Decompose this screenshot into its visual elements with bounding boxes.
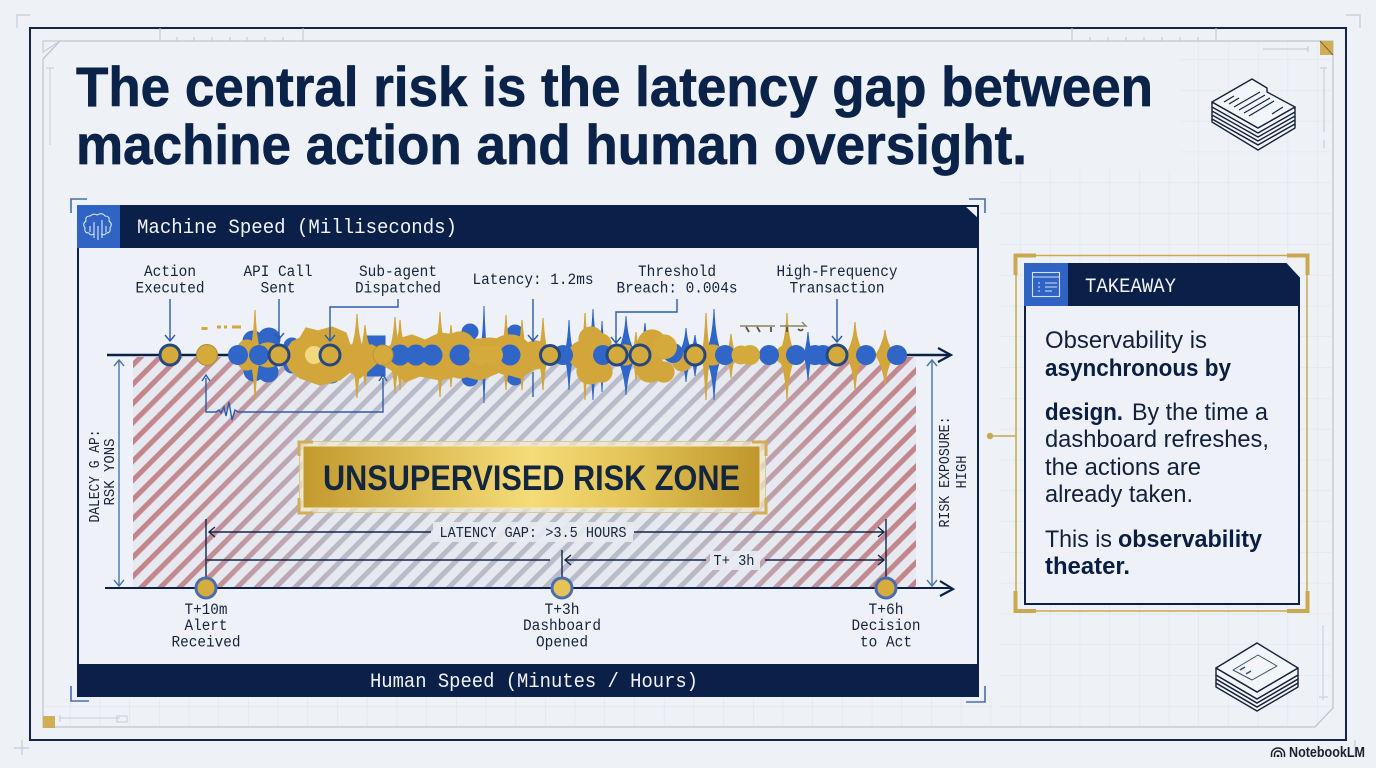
label: latency gap: LATENCY GAP: >3.5 HOURS (440, 526, 626, 542)
panel: machine and human speed (71, 199, 985, 702)
right vertical label: HIGH (954, 456, 971, 488)
banner: unsupervised risk zone (299, 442, 766, 513)
labels: human milestones: Decision (852, 617, 920, 635)
icon: chip stack (1216, 643, 1298, 711)
connector to takeaway (987, 433, 1016, 439)
hatched risk zone (133, 357, 916, 588)
takeaway text: By the time a (1132, 399, 1268, 426)
callouts: machine event labels: Threshold (638, 263, 716, 281)
takeaway text: This is (1045, 526, 1112, 553)
callouts: machine event labels: Sent (260, 280, 296, 298)
takeaway text (1045, 327, 1269, 580)
gold frame (1016, 256, 1308, 611)
panel: takeaway (1016, 256, 1308, 611)
title: machine action and human oversight. (76, 113, 1027, 176)
left vertical label (87, 430, 119, 522)
title (76, 55, 1153, 176)
axis: machine timeline (107, 348, 951, 362)
machine speed header: Machine Speed (Milliseconds) (137, 217, 457, 240)
human speed footer: Human Speed (Minutes / Hours) (370, 671, 698, 694)
takeaway text: already taken. (1045, 481, 1193, 508)
corner brackets (71, 199, 985, 702)
takeaway text: observability (1118, 526, 1262, 553)
latency gap brackets (206, 519, 886, 578)
panel body (78, 206, 978, 696)
callouts: machine event labels: High-Frequency (776, 263, 898, 281)
icon: circuit gear (84, 214, 111, 240)
labels: human milestones (172, 601, 920, 652)
labels: human milestones: Alert (184, 617, 228, 635)
callouts: machine event labels: Transaction (790, 280, 884, 298)
labels: human milestones: T+3h (544, 601, 580, 619)
takeaway text: design. (1045, 399, 1123, 426)
labels: human milestones: to Act (860, 634, 912, 652)
human speed footer (77, 664, 979, 697)
left vertical label: RSK YONS (102, 438, 119, 506)
arrow: latency gap span (207, 527, 884, 565)
arrows: vertical risk exposure spans (114, 360, 937, 586)
takeaway text: theater. (1045, 553, 1130, 580)
callouts: machine event labels: Dispatched (355, 280, 441, 298)
callouts: machine event labels: API Call (244, 263, 312, 281)
callouts: machine event labels: Executed (136, 280, 204, 298)
card (1025, 264, 1299, 604)
labels: human milestones: Received (172, 634, 240, 652)
takeaway text: the actions are (1045, 454, 1201, 481)
axis: human timeline (105, 581, 953, 596)
labels: human milestones: T+6h (868, 601, 904, 619)
takeaway text: asynchronous by (1045, 355, 1231, 382)
human milestones (196, 578, 896, 598)
card header (1024, 263, 1300, 306)
labels: human milestones: Dashboard (523, 617, 601, 635)
card header: TAKEAWAY (1085, 276, 1176, 299)
left vertical label: DALECY G AP: (87, 430, 104, 522)
title: The central risk is the latency gap between (76, 55, 1153, 118)
takeaway text: dashboard refreshes, (1045, 426, 1269, 453)
right vertical label (937, 416, 971, 528)
takeaway text: Observability is (1045, 327, 1207, 354)
callouts: machine event labels: Sub-agent (359, 263, 437, 281)
label: T+3h span: T+ 3h (714, 554, 754, 570)
icon: list window (1032, 272, 1060, 296)
callouts: machine event labels: Action (144, 263, 196, 281)
right vertical label: RISK EXPOSURE: (937, 416, 954, 528)
waveform of machine events (160, 306, 907, 403)
banner: unsupervised risk zone: UNSUPERVISED RISK ZONE (323, 459, 740, 498)
callouts: machine event labels (136, 263, 898, 298)
arrows: event pointers (165, 299, 842, 420)
NotebookLM logo: NotebookLM (1289, 745, 1365, 761)
labels: human milestones: Opened (536, 634, 588, 652)
machine speed header (77, 205, 979, 248)
callouts: machine event labels: Latency: 1.2ms (472, 271, 594, 289)
icon: document stack (1212, 79, 1295, 150)
callouts: machine event labels: Breach: 0.004s (616, 280, 738, 298)
labels: human milestones: T+10m (184, 601, 228, 619)
